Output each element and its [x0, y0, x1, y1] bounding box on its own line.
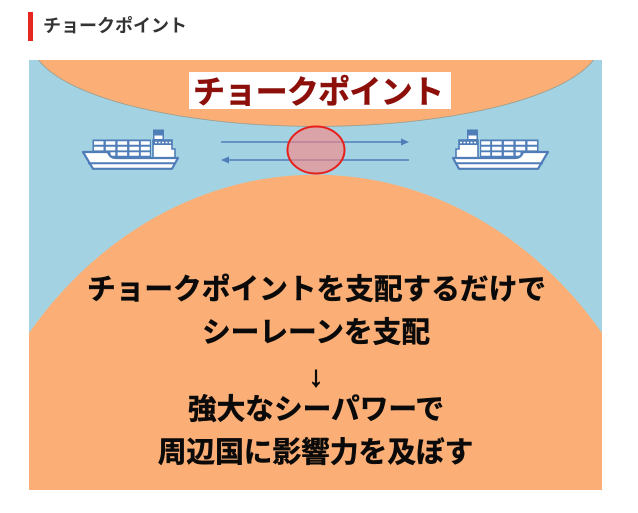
text: main message: チョークポイントを支配するだけで [87, 274, 546, 306]
land: upper coast [38, 60, 594, 126]
icon: left container ship [83, 130, 178, 169]
choke point marker [288, 126, 344, 174]
title label: チョークポイント [193, 74, 444, 110]
text: main message [87, 274, 546, 469]
coast outline [38, 60, 594, 126]
section heading: チョークポイント [43, 15, 187, 36]
arrow: westbound route [221, 156, 409, 164]
panel: choke point diagram [29, 60, 602, 490]
arrow: eastbound route [221, 138, 409, 146]
land: lower coast [29, 175, 602, 490]
heading accent bar [28, 12, 33, 41]
sea background [29, 60, 602, 490]
text: main message: 強大なシーパワーで [188, 394, 444, 426]
text: main message: ↓ [309, 361, 323, 393]
text: main message: 周辺国に影響力を及ぼす [158, 437, 473, 469]
icon: right container ship [453, 130, 548, 169]
text: main message: シーレーンを支配 [202, 317, 430, 349]
